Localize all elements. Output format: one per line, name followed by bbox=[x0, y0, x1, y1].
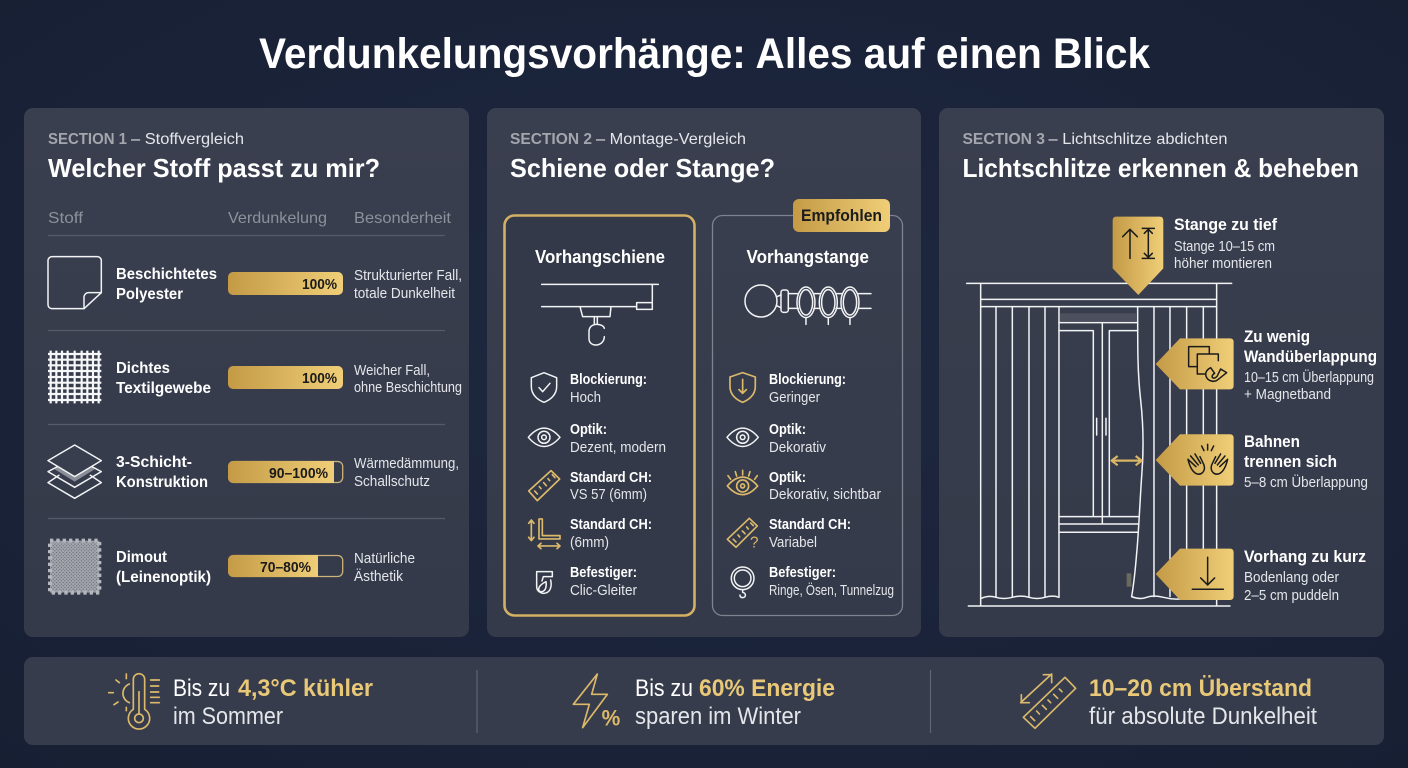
row: Befestiger: Clic-Gleiter bbox=[570, 583, 637, 599]
card: Vorhangschiene bbox=[504, 216, 694, 616]
row: Standard CH VS 57: VS 57 (6mm) bbox=[570, 487, 647, 503]
icon: ruler with arrow bbox=[1021, 674, 1076, 728]
row: Standard CH VS 57: Standard CH: bbox=[570, 470, 652, 486]
row: Dichtes Textilgewebe bbox=[48, 351, 462, 403]
section label: SECTION 1 bbox=[48, 131, 127, 148]
callout: Stange zu tief: Stange zu tief bbox=[1174, 216, 1277, 234]
icon: thermometer and sun bbox=[109, 674, 159, 729]
table header: Stoff bbox=[48, 210, 84, 227]
callout: Vorhang zu kurz: 2–5 cm puddeln bbox=[1244, 588, 1339, 604]
bar: 90-100% bbox=[228, 461, 343, 483]
callout: Stange zu tief: höher montieren bbox=[1174, 256, 1272, 272]
badge: Empfohlen: Empfohlen bbox=[801, 206, 882, 225]
card: Vorhangstange: Vorhangstange bbox=[746, 247, 869, 267]
row: Dimout (Leinenoptik) bbox=[50, 541, 415, 593]
table header: Verdunkelung bbox=[228, 210, 327, 227]
icon: three layers bbox=[48, 445, 101, 498]
stat: overhang bbox=[1021, 674, 1317, 730]
stat: cooler in summer: 4,3°C kühler bbox=[238, 675, 373, 702]
section label bbox=[48, 131, 244, 148]
row: Optik: Dezent, modern bbox=[570, 440, 666, 456]
row: Standard CH 6mm: (6mm) bbox=[570, 535, 609, 551]
callout: Bahnen trennen sich: trennen sich bbox=[1244, 453, 1337, 471]
bar: 100% bbox=[228, 366, 343, 389]
row: Optik sichtbar: Dekorativ, sichtbar bbox=[769, 487, 881, 503]
row: Blockierung: Blockierung: bbox=[769, 372, 846, 388]
callout: Zu wenig Wandüberlappung: Wandüberlappung bbox=[1244, 348, 1377, 366]
row: Dimout (Leinenoptik): Natürliche bbox=[354, 551, 415, 567]
stat: energy saving bbox=[573, 674, 835, 731]
bar: 100%: 100% bbox=[302, 370, 337, 387]
stat: cooler in summer: im Sommer bbox=[173, 703, 283, 730]
row: Blockierung: Blockierung: bbox=[570, 372, 647, 388]
row: Optik dekorativ: Dekorativ bbox=[769, 440, 827, 456]
row: Standard CH 6mm bbox=[529, 517, 652, 551]
row: Blockierung: Geringer bbox=[769, 390, 820, 406]
table header: Besonderheit bbox=[354, 210, 452, 227]
row: Blockierung bbox=[730, 372, 846, 406]
row: Beschichtetes Polyester bbox=[48, 257, 462, 309]
icon: lightning percent: % bbox=[602, 706, 620, 731]
diagram: curtain and window bbox=[967, 283, 1232, 606]
card: Vorhangstange bbox=[712, 199, 902, 616]
icon: curtain rod bbox=[745, 285, 871, 324]
row: Standard CH variabel bbox=[727, 517, 851, 552]
section label: SECTION 3 bbox=[962, 131, 1045, 148]
stat: energy saving: Bis zu bbox=[635, 675, 693, 702]
row: Optik: Optik: bbox=[570, 422, 607, 438]
panel: mounting comparison bbox=[487, 108, 921, 637]
badge: Empfohlen bbox=[793, 199, 890, 232]
row: Dimout (Leinenoptik): (Leinenoptik) bbox=[116, 569, 211, 586]
row: Optik bbox=[528, 422, 666, 456]
row: Befestiger: Befestiger: bbox=[769, 565, 836, 581]
row: Dichtes Textilgewebe: Dichtes bbox=[116, 360, 170, 377]
row: Optik dekorativ: Optik: bbox=[769, 422, 806, 438]
row: 3-Schicht-Konstruktion bbox=[48, 445, 459, 498]
icon: curtain track bbox=[542, 284, 658, 345]
stat: overhang: für absolute Dunkelheit bbox=[1089, 703, 1317, 730]
row: Befestiger: Ringe, Ösen, Tunnelzug bbox=[769, 581, 894, 599]
callout: Vorhang zu kurz bbox=[1156, 548, 1366, 604]
icon: linen swatch bbox=[50, 541, 99, 593]
bar: 70-80% bbox=[228, 555, 343, 577]
row: Beschichtetes Polyester: Beschichtetes bbox=[116, 266, 217, 283]
row: Befestiger bbox=[731, 565, 894, 599]
icon: dense weave bbox=[48, 351, 101, 403]
stat: energy saving: 60% Energie bbox=[699, 675, 835, 702]
stat: cooler in summer bbox=[109, 674, 373, 730]
row: Optik dekorativ bbox=[727, 422, 827, 456]
section label: – Stoffvergleich bbox=[131, 131, 244, 148]
row: Dichtes Textilgewebe: Weicher Fall, bbox=[354, 363, 430, 379]
row: Beschichtetes Polyester: Polyester bbox=[116, 286, 183, 303]
row: Blockierung: Hoch bbox=[570, 390, 601, 406]
callout: Zu wenig Wandüberlappung: 10–15 cm Überlappung bbox=[1244, 368, 1374, 386]
row: Standard CH 6mm: Standard CH: bbox=[570, 517, 652, 533]
callout: Bahnen trennen sich: Bahnen bbox=[1244, 433, 1300, 451]
callout: Stange zu tief: Stange 10–15 cm bbox=[1174, 239, 1275, 255]
callout: Zu wenig Wandüberlappung: + Magnetband bbox=[1244, 387, 1331, 403]
bar: 100% bbox=[228, 272, 343, 295]
panel: fabric comparison bbox=[24, 108, 469, 637]
row: 3-Schicht-Konstruktion: Schallschutz bbox=[354, 474, 430, 490]
section label: SECTION 2 bbox=[510, 131, 592, 148]
panel: light gaps bbox=[939, 108, 1384, 637]
stat: overhang: 10–20 cm Überstand bbox=[1089, 675, 1312, 702]
row: Dichtes Textilgewebe: Textilgewebe bbox=[116, 380, 211, 397]
section label: – Montage-Vergleich bbox=[596, 131, 746, 148]
icon: lightning percent bbox=[573, 674, 620, 731]
row: Optik sichtbar bbox=[727, 470, 881, 503]
stat: energy saving: sparen im Winter bbox=[635, 703, 801, 730]
callout: Zu wenig Wandüberlappung bbox=[1156, 328, 1377, 403]
section label bbox=[510, 131, 746, 148]
row: Beschichtetes Polyester: totale Dunkelheit bbox=[354, 286, 455, 302]
row: Standard CH VS 57 bbox=[529, 470, 652, 503]
section label bbox=[962, 131, 1228, 148]
row: Dimout (Leinenoptik): Ästhetik bbox=[354, 568, 404, 585]
row: Standard CH variabel: Variabel bbox=[769, 535, 817, 551]
heading: Welcher Stoff passt zu mir? bbox=[48, 153, 380, 183]
row: Optik sichtbar: Optik: bbox=[769, 470, 806, 486]
footer bar bbox=[24, 657, 1384, 745]
callout: Zu wenig Wandüberlappung: Zu wenig bbox=[1244, 328, 1310, 346]
row: Standard CH variabel: Standard CH: bbox=[769, 517, 851, 533]
callout: Vorhang zu kurz: Vorhang zu kurz bbox=[1244, 548, 1366, 566]
row: Dichtes Textilgewebe: ohne Beschichtung bbox=[354, 380, 462, 396]
stat: cooler in summer: Bis zu bbox=[173, 675, 230, 702]
arrow: gap bbox=[1112, 456, 1142, 465]
bar: 70-80%: 70–80% bbox=[260, 559, 311, 576]
callout: Stange zu tief bbox=[1113, 216, 1277, 295]
card: Vorhangschiene: Vorhangschiene bbox=[535, 247, 665, 267]
row: 3-Schicht-Konstruktion: Konstruktion bbox=[116, 474, 208, 491]
title: Verdunkelungsvorhänge: Alles auf einen Blick bbox=[259, 30, 1150, 78]
row: 3-Schicht-Konstruktion: Wärmedämmung, bbox=[354, 456, 459, 472]
heading: Lichtschlitze erkennen & beheben bbox=[962, 153, 1359, 183]
row: Dimout (Leinenoptik): Dimout bbox=[116, 549, 168, 566]
callout: Bahnen trennen sich bbox=[1156, 433, 1368, 491]
table header bbox=[48, 210, 452, 227]
row: Befestiger bbox=[537, 565, 637, 599]
bar: 90-100%: 90–100% bbox=[269, 465, 328, 482]
row: 3-Schicht-Konstruktion: 3-Schicht- bbox=[116, 454, 192, 471]
section label: – Lichtschlitze abdichten bbox=[1048, 131, 1228, 148]
row: Befestiger: Befestiger: bbox=[570, 565, 637, 581]
callout: Bahnen trennen sich: 5–8 cm Überlappung bbox=[1244, 473, 1368, 491]
bar: 100%: 100% bbox=[302, 276, 337, 293]
row: Beschichtetes Polyester: Strukturierter Fall, bbox=[354, 268, 462, 284]
heading: Schiene oder Stange? bbox=[510, 153, 775, 183]
icon: coated sheet bbox=[48, 257, 101, 309]
callout: Vorhang zu kurz: Bodenlang oder bbox=[1244, 570, 1339, 586]
row: Standard CH variabel: ? bbox=[750, 535, 759, 552]
row: Blockierung bbox=[531, 372, 647, 406]
